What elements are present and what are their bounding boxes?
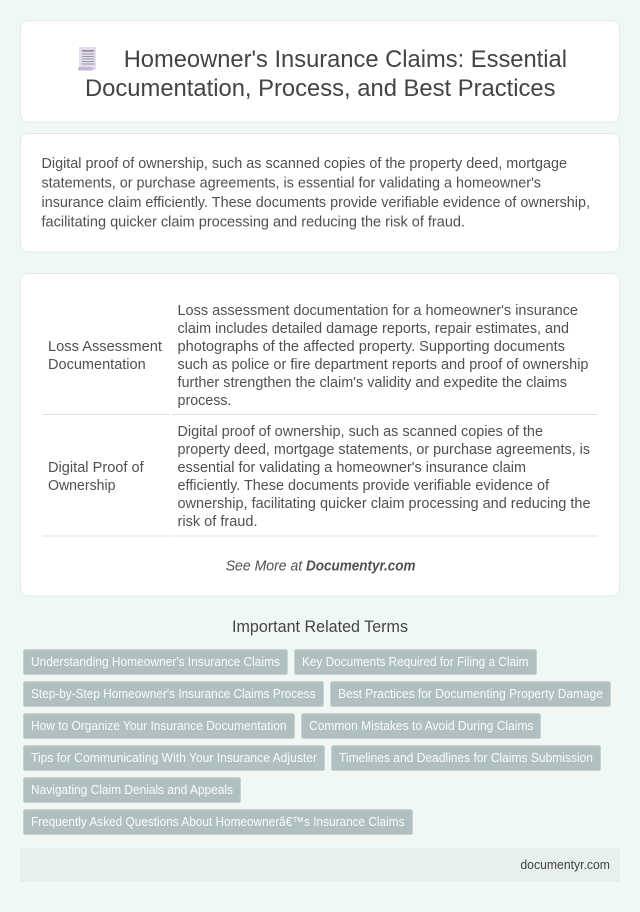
- table row: digital proof: [43, 424, 597, 536]
- table row: loss assessment: Loss assessment documentation for a homeowner's insurance: [178, 303, 578, 319]
- table row: loss assessment: further strengthen the claim's validity and expedite the claims: [178, 375, 567, 391]
- table row: digital proof: property deed, mortgage statements, or purchase agreements, is: [178, 442, 590, 458]
- text block: summary: Digital proof of ownership, such as scanned copies of the property deed, mortgage: [42, 156, 567, 172]
- table row: loss assessment: Documentation: [48, 357, 146, 373]
- heading: related terms: Important Related Terms: [232, 618, 408, 636]
- chip: [330, 682, 610, 706]
- chip: Tips for Communicating With Your Insurance Adjuster: [31, 750, 318, 765]
- table row: digital proof: Ownership: [48, 478, 116, 494]
- chip: Frequently Asked Questions About Homeownerâ€™s Insurance Claims: [31, 814, 404, 829]
- chip: [24, 746, 324, 770]
- chip: Step-by-Step Homeowner's Insurance Claims Process: [31, 686, 316, 701]
- heading: [85, 46, 567, 102]
- chip: Common Mistakes to Avoid During Claims: [309, 718, 534, 733]
- heading: Homeowner's Insurance Claims: Essential: [124, 46, 567, 73]
- text block: summary: facilitating quicker claim processing and reducing the risk of fraud.: [42, 214, 465, 230]
- footer: [20, 848, 620, 882]
- text block: summary: [42, 156, 590, 230]
- chip: How to Organize Your Insurance Documentation: [31, 718, 286, 733]
- table row: loss assessment: process.: [178, 393, 232, 409]
- table row: digital proof: ownership, facilitating quicker claim processing and reducing the: [178, 496, 590, 512]
- table row: digital proof: essential for validating a homeowner's insurance claim: [178, 460, 526, 476]
- chip: [24, 650, 288, 674]
- text block: summary: statements, or purchase agreements, is essential for validating a homeowner's: [42, 176, 541, 192]
- panel: documentation table: [20, 274, 620, 596]
- chip: Key Documents Required for Filing a Claim: [302, 654, 528, 669]
- table row: digital proof: efficiently. These documents provide verifiable evidence of: [178, 478, 550, 494]
- footer: documentyr.com: [520, 857, 610, 872]
- table row: loss assessment: such as police or fire department reports and proof of ownership: [178, 357, 588, 373]
- chip: Understanding Homeowner's Insurance Claims: [31, 654, 280, 669]
- table row: loss assessment: [43, 303, 597, 415]
- chip: [302, 714, 540, 738]
- chip: [24, 714, 294, 738]
- chip: Timelines and Deadlines for Claims Submission: [339, 750, 593, 765]
- see more link: See More at: [226, 558, 303, 574]
- icon: document scroll: [78, 47, 96, 70]
- table row: digital proof: risk of fraud.: [178, 514, 258, 530]
- panel: title: [20, 20, 620, 122]
- table row: digital proof: Digital proof of ownership, such as scanned copies of the: [178, 424, 543, 440]
- chip: [24, 778, 240, 802]
- related terms chips: [24, 650, 610, 834]
- see more link: [226, 558, 416, 574]
- chip: Best Practices for Documenting Property Damage: [338, 686, 603, 701]
- heading: Documentation, Process, and Best Practices: [85, 75, 556, 102]
- see more link: Documentyr.com: [306, 558, 416, 574]
- table row: loss assessment: Loss Assessment: [48, 339, 162, 355]
- panel: summary: [20, 134, 620, 252]
- text block: summary: insurance claim efficiently. These documents provide verifiable evidence of ownership,: [42, 195, 590, 211]
- table row: loss assessment: claim includes detailed damage reports, repair estimates, and: [178, 321, 569, 337]
- chip: [332, 746, 600, 770]
- chip: [294, 650, 536, 674]
- table row: loss assessment: photographs of the affected property. Supporting documents: [178, 339, 565, 355]
- chip: [24, 810, 412, 834]
- table row: digital proof: Digital Proof of: [48, 460, 145, 476]
- chip: Navigating Claim Denials and Appeals: [31, 782, 233, 797]
- chip: [24, 682, 324, 706]
